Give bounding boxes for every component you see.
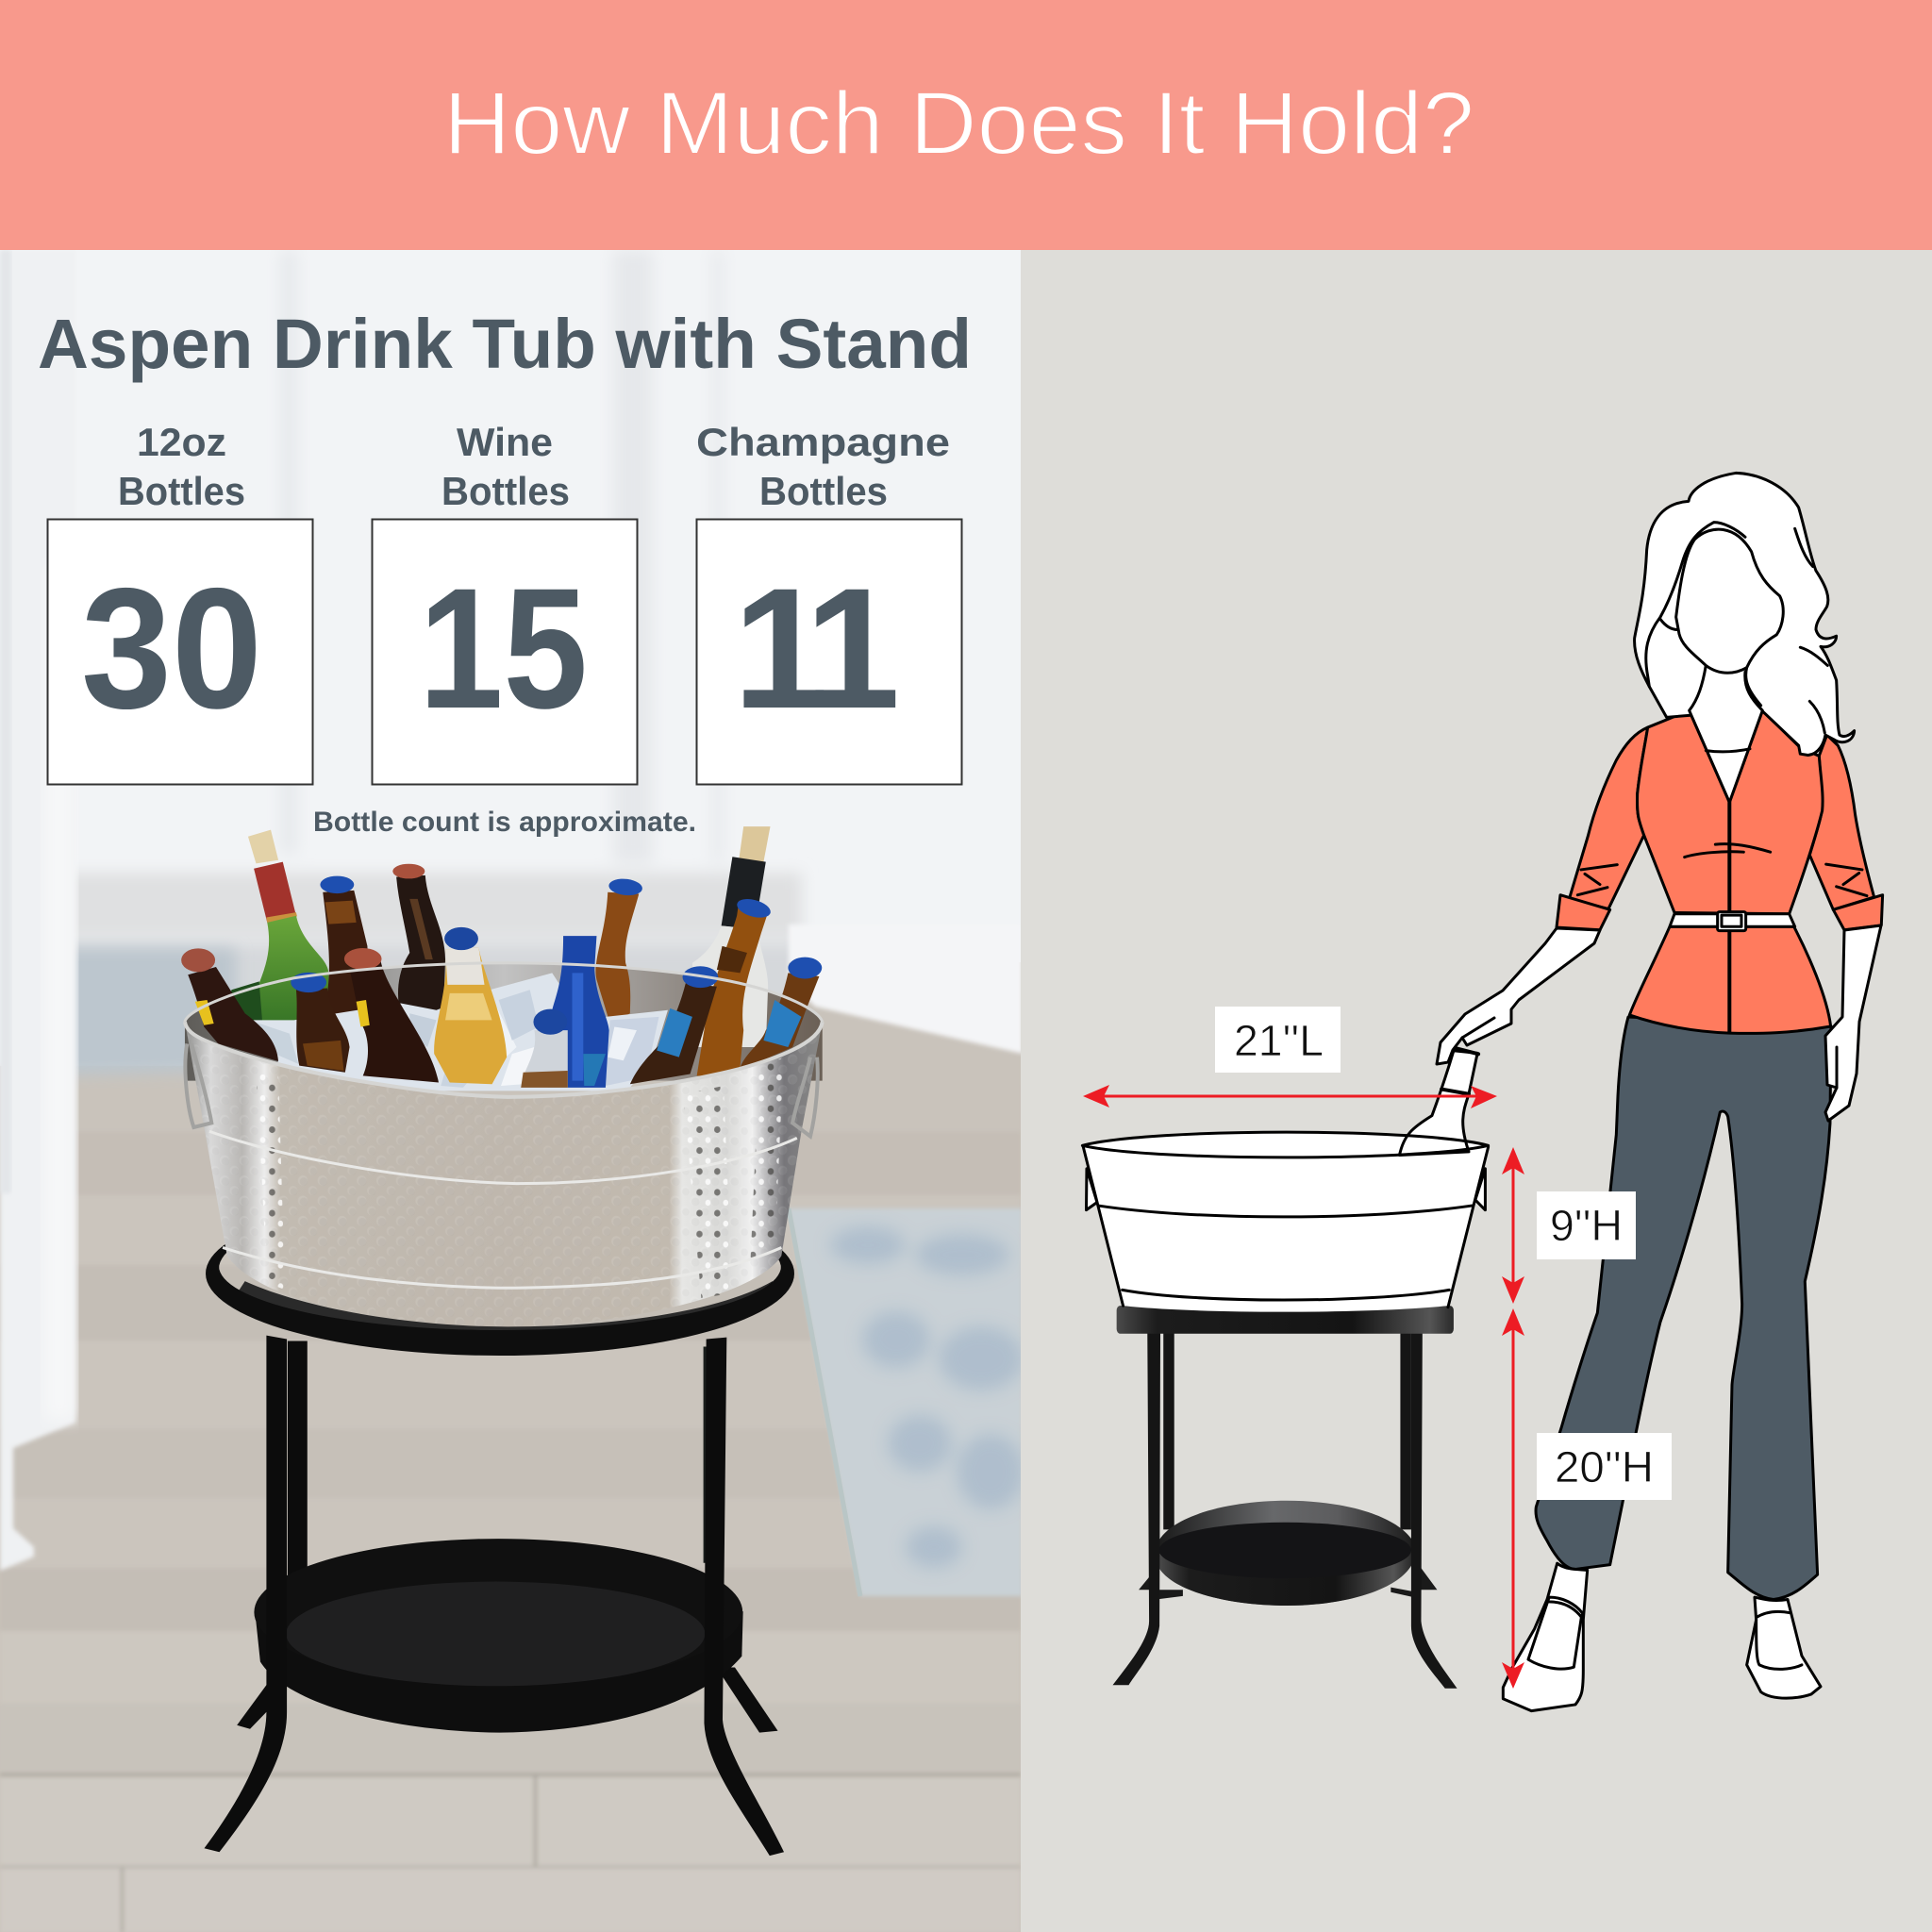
panel: left photo of the drink tub [0,250,1028,1932]
stand: front of top ring [206,1266,794,1356]
small clear bottle [521,1009,568,1088]
hair [1635,473,1855,756]
arrow: 20 inch height [1502,1308,1524,1689]
stand: back of top ring and rear legs [237,1341,778,1733]
left handle [185,1043,211,1127]
heading: product name: Aspen Drink Tub with Stand [38,305,972,383]
rug lower right [789,1208,1024,1596]
dimension label: 20 inch height: 20''H [1555,1442,1654,1491]
clear bottle with golden beer [434,927,507,1084]
hammered metal tub [185,963,823,1337]
tall amber bottle [697,895,774,1077]
shoes [1503,1563,1821,1711]
tub rim fill [1082,1132,1489,1158]
photo background: room wall and floor [0,250,1028,1932]
right wall [789,924,1023,1054]
dimension label: 21 inch length: 21''L [1234,1016,1324,1065]
header band [0,0,1932,250]
lower tray [1139,1501,1437,1606]
tub handles [1087,1169,1485,1210]
clear wine bottle [692,826,771,1047]
note: bottle count: Bottle count is approximate. [313,807,696,838]
illustration: tub on stand outline [1082,1048,1489,1689]
labelled front bottle [630,966,718,1084]
stand: front legs [204,1336,784,1856]
column: 12oz bottles [47,420,313,785]
door frame left [0,881,77,1572]
amber beer bottle [596,877,644,1024]
column: champagne bottles [696,420,962,785]
dark beer bottle [392,864,445,1020]
column: wine bottles: Bottles [441,469,570,513]
column: wine bottles: Wine [457,420,553,464]
dark bottle with yellow tag [344,948,439,1082]
column: champagne bottles: Champagne [696,420,950,464]
labelled right bottle [739,958,822,1071]
column: wine bottles [372,420,638,785]
column: 12oz bottles: 12oz [137,420,226,464]
dimension label: 9 inch height [1537,1191,1636,1259]
arm and hand on bottle [1437,928,1600,1064]
panel: right grey background [1021,250,1932,1932]
stand: lower tray [254,1539,743,1733]
far-left bottle [181,948,278,1061]
column: 12oz bottles: 30 [81,552,262,744]
arrow: 21 inch length [1083,1085,1497,1108]
face [1676,529,1783,673]
column: 12oz bottles: Bottles [118,469,245,513]
ice [245,973,668,1091]
top ring [1117,1306,1454,1334]
blouse [1569,727,1648,908]
column: wine bottles: 15 [419,552,588,744]
rug upper left [52,948,236,1075]
blouse, hair and face [1557,473,1883,1033]
front legs [1113,1330,1160,1685]
dimension label: 9 inch height: 9''H [1550,1201,1623,1250]
tub rim [1082,1132,1489,1158]
right handle [792,1058,818,1137]
arrow: 9 inch height [1502,1147,1524,1304]
illustration: woman for scale [1437,473,1883,1711]
column: champagne bottles: 11 [733,552,900,744]
dimension label: 21 inch length [1215,1007,1341,1073]
short brown bottle [291,973,350,1073]
neck [1690,665,1762,803]
tub body [1083,1147,1489,1312]
back legs [1163,1330,1411,1529]
trousers [1536,1017,1831,1599]
brown beer bottle [320,875,368,1013]
dimension label: 20 inch height [1537,1433,1672,1500]
title: How Much Does It Hold? [443,74,1474,174]
green wine bottle [248,830,328,1021]
wine bottle [1400,1048,1478,1155]
tub interior [185,963,823,1081]
column: champagne bottles: Bottles [759,469,888,513]
belt [1670,914,1795,926]
blue metal bottle [548,936,609,1088]
arm and hand at side [1825,925,1881,1121]
tub contents: bottles and ice [181,826,823,1091]
